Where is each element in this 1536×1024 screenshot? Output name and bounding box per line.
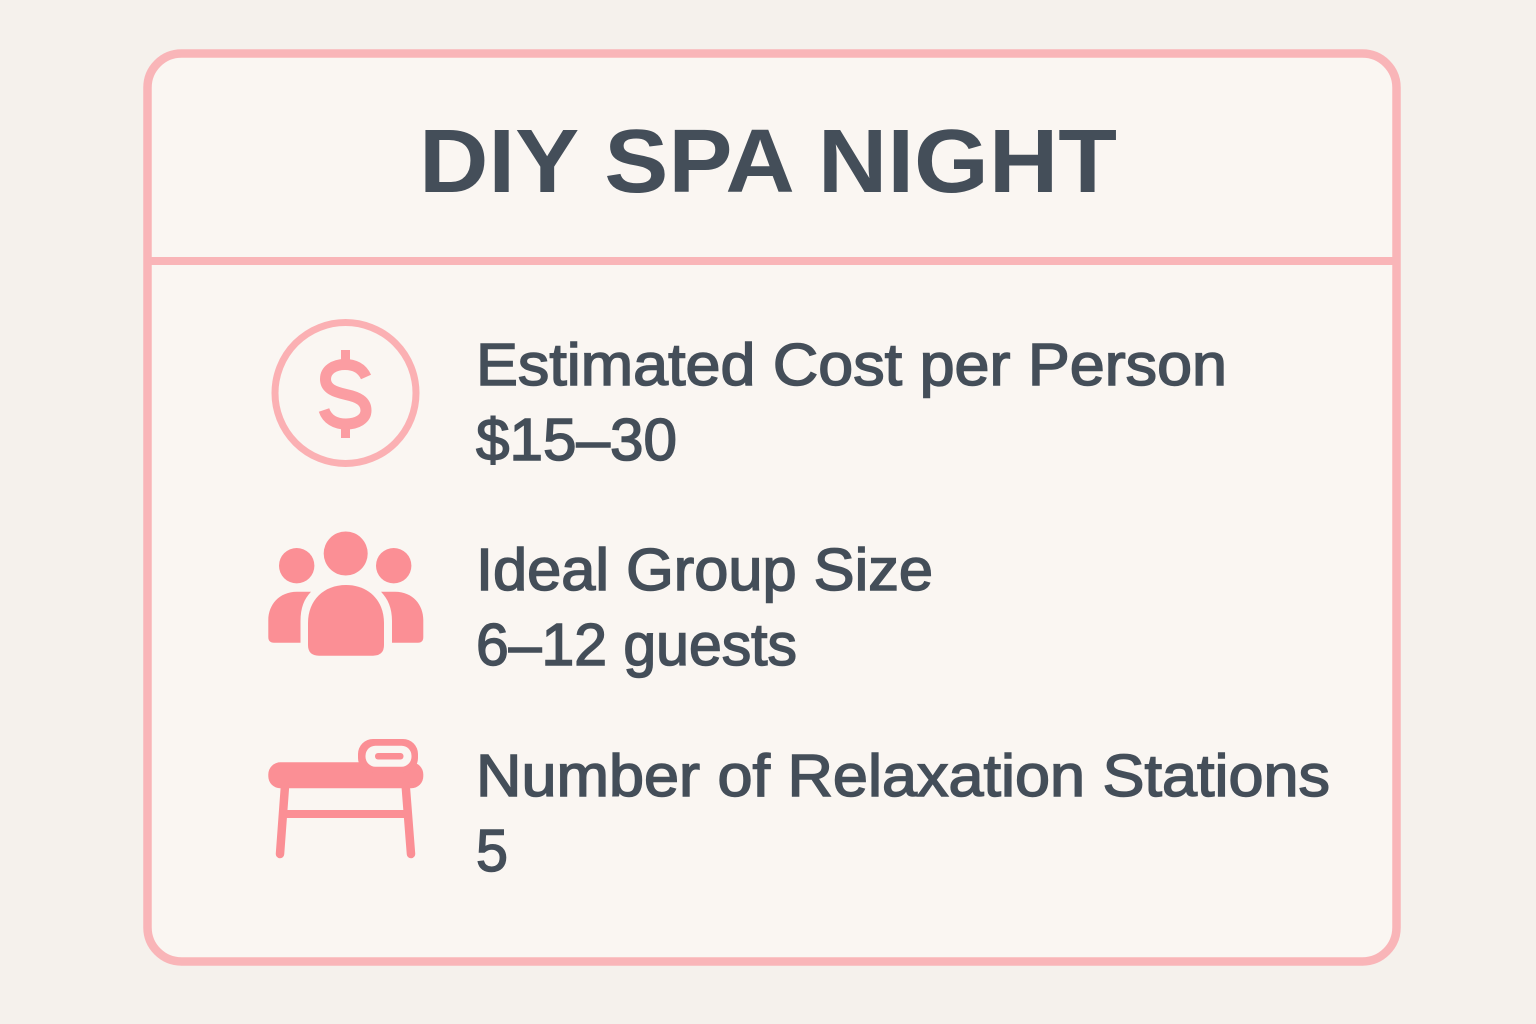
- title: DIY SPA NIGHT: [419, 112, 1117, 212]
- icon: group of people: [268, 532, 423, 656]
- text block: group size: [476, 537, 933, 678]
- icon: massage table: [268, 739, 423, 854]
- text block: cost per person: Estimated Cost per Person: [476, 332, 1227, 398]
- text block: cost per person: [476, 332, 1227, 473]
- text block: group size: Ideal Group Size: [476, 537, 933, 603]
- text block: group size: 6–12 guests: [476, 612, 797, 678]
- text block: relaxation stations: 5: [476, 818, 508, 884]
- text block: relaxation stations: [476, 743, 1330, 884]
- icon: dollar coin: [275, 322, 416, 464]
- panel: main card: [148, 54, 1396, 962]
- text block: relaxation stations: Number of Relaxation Stations: [476, 743, 1330, 809]
- text block: cost per person: $15–30: [476, 407, 677, 473]
